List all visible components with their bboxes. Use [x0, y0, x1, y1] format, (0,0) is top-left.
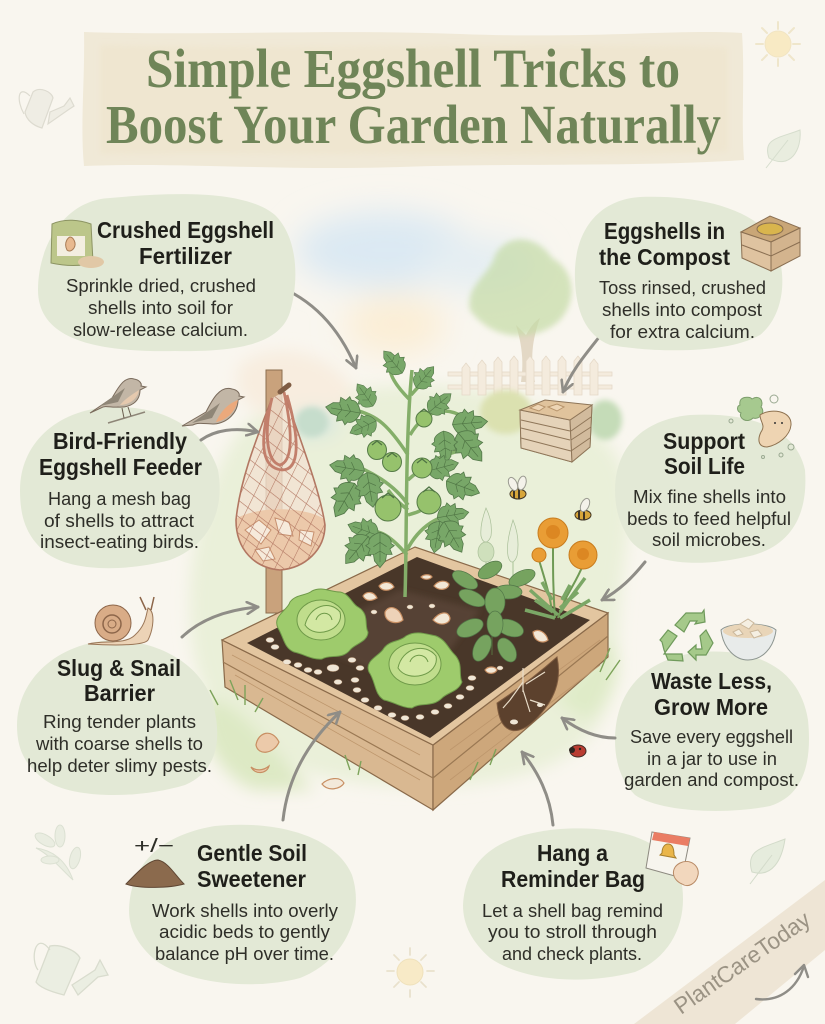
heading: Bird-Friendly — [53, 428, 187, 454]
body text: balance pH over time. — [155, 943, 334, 964]
icon: microbes — [729, 395, 794, 458]
callout: slug and snail barrier — [17, 597, 217, 795]
icon: faded leaf lower right — [750, 839, 785, 884]
body text: acidic beds to gently — [159, 921, 331, 942]
body text: in a jar to use in — [647, 748, 777, 769]
body text: shells into compost — [602, 299, 762, 320]
heading: Gentle Soil — [197, 840, 307, 866]
heading: Grow More — [654, 694, 768, 720]
callout: waste less grow more — [615, 610, 809, 811]
icon: faded sprig lower left — [33, 825, 83, 880]
icon: bowl of shells — [721, 619, 776, 660]
body text: Mix fine shells into — [633, 486, 786, 507]
arrow: soil life — [602, 562, 645, 600]
heading: Waste Less, — [651, 668, 772, 694]
callout: eggshells in the compost — [575, 197, 800, 350]
body text: Hang a mesh bag — [48, 488, 191, 509]
mesh bag on post — [235, 370, 326, 614]
heading: Soil Life — [664, 453, 745, 479]
icon: calendar and shell — [646, 832, 698, 886]
icon: snail — [88, 597, 154, 645]
body text: slow-release calcium. — [73, 319, 248, 340]
heading: Barrier — [84, 680, 155, 706]
soil — [247, 557, 590, 738]
body text: help deter slimy pests. — [27, 755, 212, 776]
body text: Work shells into overly — [152, 900, 339, 921]
title banner — [82, 32, 744, 168]
icon: soil pile with plus minus: +/− — [134, 836, 174, 857]
callout: gentle soil sweetener — [126, 825, 356, 984]
cutaway roots — [497, 657, 559, 731]
brand text: PlantCareToday — [669, 906, 815, 1019]
arrow: reminder bag — [522, 752, 553, 825]
icon: fertilizer bag — [51, 220, 104, 268]
heading: Crushed Eggshell — [97, 217, 274, 243]
body text: beds to feed helpful — [627, 508, 791, 529]
icon: faded leaf top right — [766, 130, 800, 168]
body text: Save every eggshell — [630, 726, 793, 747]
raised bed — [210, 343, 620, 810]
arrow: slug barrier — [182, 607, 258, 637]
body text: shells into soil for — [88, 297, 233, 318]
body text: insect-eating birds. — [40, 531, 199, 552]
meadow wash — [190, 351, 629, 790]
body text: Ring tender plants — [43, 711, 196, 732]
icon: recycling symbol — [660, 610, 713, 661]
icon: curved arrow — [756, 965, 808, 999]
body text: of shells to attract — [44, 510, 194, 531]
body text: with coarse shells to — [35, 733, 203, 754]
arrow: fertilizer — [275, 285, 356, 368]
icon: soil pile with plus minus — [126, 836, 184, 887]
fence — [448, 356, 612, 395]
eggshell chips in soil — [266, 604, 503, 720]
body text: Let a shell bag remind — [482, 900, 663, 921]
arrow: waste less — [562, 718, 615, 738]
grass tufts — [210, 648, 620, 780]
heading: Eggshell Feeder — [39, 454, 202, 480]
heading: Fertilizer — [139, 243, 232, 269]
body text: for extra calcium. — [610, 321, 755, 342]
sky wash — [295, 212, 540, 355]
bushes — [296, 390, 622, 440]
bees — [506, 475, 592, 520]
arrow: gentle soil — [283, 712, 340, 820]
eggshell halves — [363, 575, 548, 673]
body text: and check plants. — [502, 943, 642, 964]
arrow: compost — [563, 336, 600, 392]
icon: faded sun bottom — [387, 948, 434, 997]
heading: Sweetener — [197, 866, 306, 892]
lettuce left — [277, 589, 368, 659]
corner ribbon with brand — [634, 880, 825, 1024]
tree — [469, 239, 572, 382]
title text: Simple Eggshell Tricks to — [146, 38, 680, 99]
title text: Boost Your Garden Naturally — [106, 94, 721, 155]
heading: the Compost — [599, 244, 730, 270]
body text: garden and compost. — [624, 769, 799, 790]
central garden scene — [17, 194, 825, 1024]
icon: robin and arrow to bag — [182, 388, 258, 440]
body text: Sprinkle dried, crushed — [66, 275, 256, 296]
compost box — [520, 400, 592, 462]
herb plant — [449, 508, 538, 665]
icon: bird on twig — [90, 379, 146, 423]
icon: sun top right — [756, 22, 800, 66]
heading: Hang a — [537, 840, 609, 866]
callout: support soil life — [615, 395, 805, 563]
heading: Support — [663, 428, 745, 454]
tomato plant — [322, 343, 493, 597]
lettuce right — [368, 633, 462, 708]
callout: hang a reminder bag — [463, 828, 698, 980]
body text: Toss rinsed, crushed — [599, 277, 766, 298]
body text: soil microbes. — [652, 529, 766, 550]
loose eggshells — [251, 733, 344, 789]
heading: Eggshells in — [604, 218, 725, 244]
marigolds — [525, 518, 597, 618]
icon: faded watering can lower left — [34, 943, 108, 995]
icon: faded watering can top left — [19, 90, 74, 128]
heading: Slug & Snail — [57, 655, 181, 681]
body text: you to stroll through — [488, 921, 657, 942]
heading: Reminder Bag — [501, 866, 645, 892]
ladybug — [569, 745, 586, 757]
callout: crushed eggshell fertilizer — [38, 194, 295, 351]
callout: bird-friendly eggshell feeder — [20, 407, 220, 568]
icon: crate — [741, 216, 800, 271]
